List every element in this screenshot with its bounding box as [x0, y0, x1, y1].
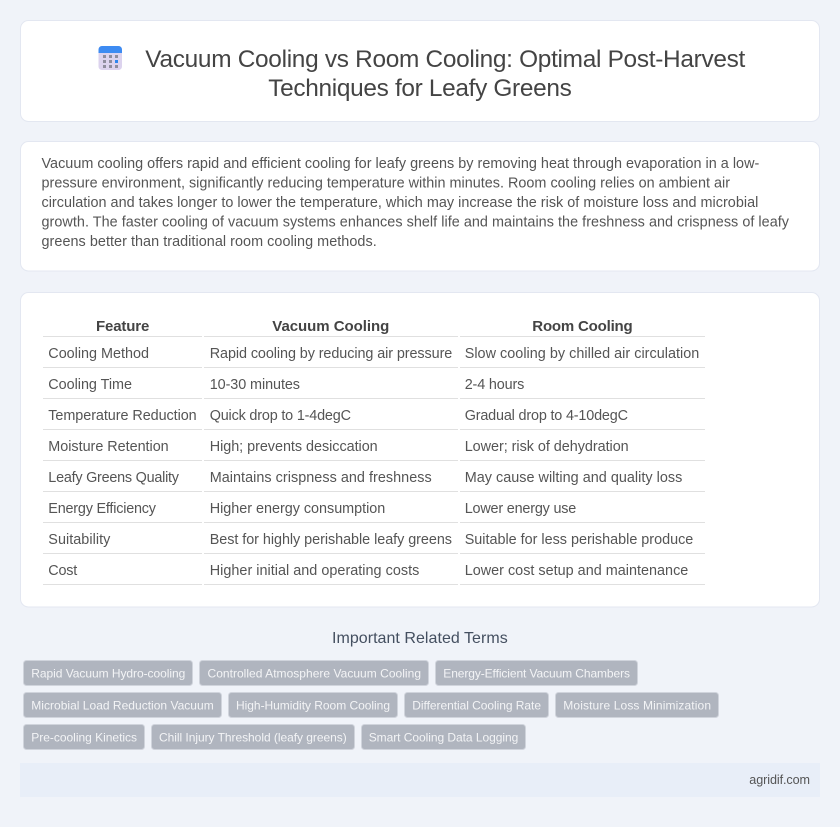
related terms tags: [24, 660, 718, 750]
table header row: Vacuum Cooling: [272, 318, 389, 335]
intro paragraph: Vacuum cooling offers rapid and efficient cooling for leafy greens by removing heat through evaporation in a low-: [42, 156, 760, 172]
intro paragraph: growth. The faster cooling of vacuum systems enhances shelf life and maintains the freshness and crispness of leafy: [42, 214, 790, 230]
tag: [436, 660, 638, 686]
header panel: [20, 20, 820, 122]
row: cooling time: [43, 377, 705, 399]
row: leafy greens quality: May cause wilting and quality loss: [465, 470, 682, 486]
table panel: [20, 292, 820, 607]
row: leafy greens quality: [43, 470, 705, 492]
row: moisture retention: High; prevents desiccation: [210, 439, 378, 455]
row: temperature reduction: Gradual drop to 4-10degC: [465, 408, 628, 424]
footer bar: [20, 763, 820, 797]
title: [145, 46, 746, 102]
tag: [152, 724, 354, 750]
tag: [556, 692, 718, 718]
row: leafy greens quality: Leafy Greens Quality: [48, 470, 180, 486]
row: temperature reduction: Temperature Reduction: [48, 408, 197, 424]
row: cooling method: Cooling Method: [48, 346, 149, 362]
title: Techniques for Leafy Greens: [268, 75, 572, 102]
tag: [228, 692, 398, 718]
table header row: Feature: [96, 318, 149, 335]
row: moisture retention: Moisture Retention: [48, 439, 169, 455]
tag: Controlled Atmosphere Vacuum Cooling: [208, 666, 421, 680]
row: cost: Lower cost setup and maintenance: [465, 563, 688, 579]
tag: [404, 692, 548, 718]
intro paragraph: greens better than traditional room cooling methods.: [42, 234, 377, 250]
comparison table: [43, 318, 705, 585]
row: energy efficiency: Energy Efficiency: [48, 501, 157, 517]
tag: Differential Cooling Rate: [412, 698, 541, 712]
intro paragraph: circulation and takes longer to lower the temperature, which may increase the risk of moisture loss and microbial: [42, 195, 758, 211]
tag: [200, 660, 428, 686]
table header row: Room Cooling: [532, 318, 633, 335]
tag: Energy-Efficient Vacuum Chambers: [443, 666, 630, 680]
tag: Moisture Loss Minimization: [563, 698, 711, 712]
row: cooling time: 2-4 hours: [465, 377, 524, 393]
intro paragraph: pressure environment, significantly reducing temperature within minutes. Room cooling relies on ambient air: [42, 176, 730, 192]
row: cooling method: Slow cooling by chilled air circulation: [465, 346, 699, 362]
footer source text: agridif.com: [749, 773, 810, 787]
related terms heading: Important Related Terms: [332, 630, 508, 647]
icon: calendar grid: [98, 46, 122, 70]
row: suitability: Suitable for less perishable produce: [465, 532, 693, 548]
tag: [24, 692, 222, 718]
row: energy efficiency: Higher energy consumption: [210, 501, 385, 517]
row: cooling time: 10-30 minutes: [210, 377, 300, 393]
row: energy efficiency: Lower energy use: [465, 501, 576, 517]
intro paragraph: [42, 156, 790, 250]
row: cooling method: Rapid cooling by reducing air pressure: [210, 346, 452, 362]
row: cost: [43, 563, 705, 585]
intro panel: [20, 142, 820, 271]
table header row: [43, 318, 705, 337]
row: temperature reduction: Quick drop to 1-4degC: [210, 408, 351, 424]
row: cooling method: [43, 346, 705, 368]
tag: [24, 724, 144, 750]
row: temperature reduction: [43, 408, 705, 430]
tag: Microbial Load Reduction Vacuum: [31, 698, 214, 712]
tag: Pre-cooling Kinetics: [31, 730, 137, 744]
row: moisture retention: Lower; risk of dehydration: [465, 439, 629, 455]
tag: Smart Cooling Data Logging: [369, 730, 518, 744]
row: cost: Cost: [48, 563, 77, 579]
row: suitability: Best for highly perishable leafy greens: [210, 532, 452, 548]
tag: High-Humidity Room Cooling: [236, 698, 390, 712]
row: cost: Higher initial and operating costs: [210, 563, 419, 579]
row: leafy greens quality: Maintains crispness and freshness: [210, 470, 432, 486]
tag: [362, 724, 526, 750]
tag: [24, 660, 192, 686]
tag: Chill Injury Threshold (leafy greens): [159, 730, 347, 744]
title: Vacuum Cooling vs Room Cooling: Optimal Post-Harvest: [145, 46, 746, 73]
row: suitability: [43, 532, 705, 554]
row: moisture retention: [43, 439, 705, 461]
row: cooling time: Cooling Time: [48, 377, 132, 393]
tag: Rapid Vacuum Hydro-cooling: [31, 666, 185, 680]
row: energy efficiency: [43, 501, 705, 523]
row: suitability: Suitability: [48, 532, 111, 548]
